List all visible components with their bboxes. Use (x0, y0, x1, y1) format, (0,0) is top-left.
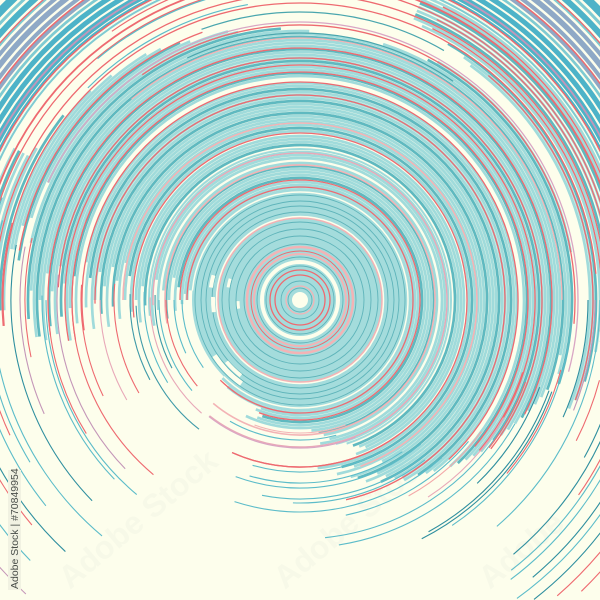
inner closed rings (181, 181, 419, 419)
dark teal lines in inner rings (195, 195, 405, 405)
faint watermark: Adobe Stock (51, 442, 224, 595)
faint watermark: Adobe Stock (266, 442, 439, 595)
faint watermark (51, 442, 571, 595)
stock id label: Adobe Stock | #70849954 (9, 468, 21, 589)
faint watermark: Adobe (471, 504, 571, 595)
